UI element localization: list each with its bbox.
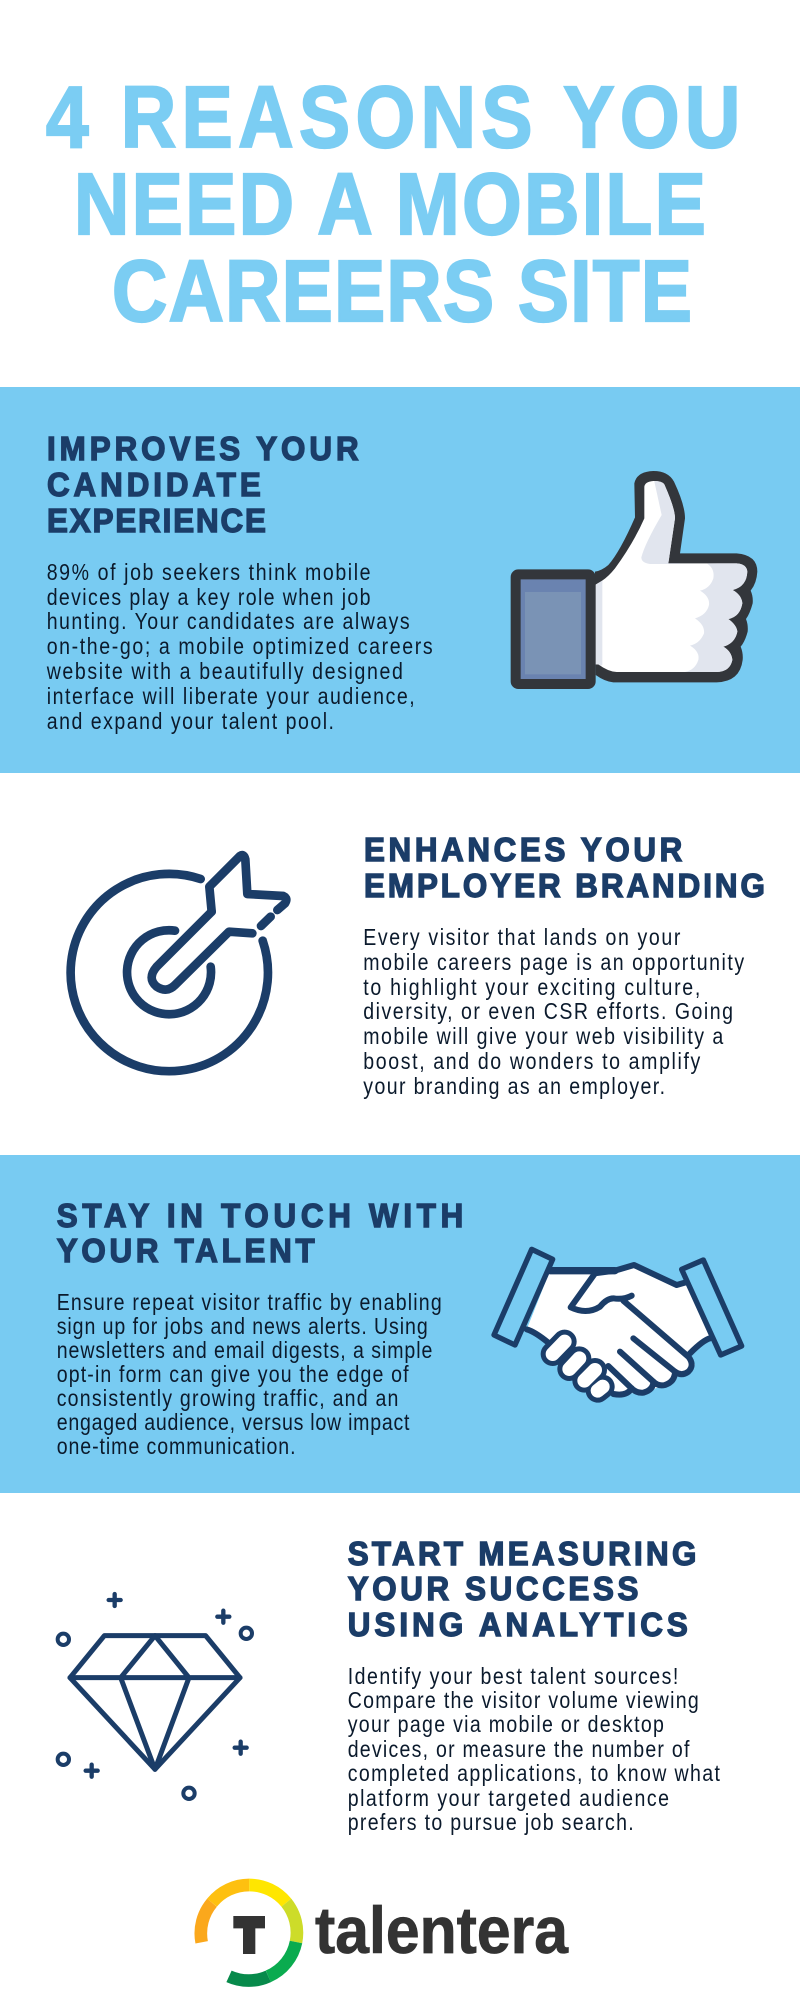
title	[46, 69, 740, 340]
panel: improves your candidate experience	[0, 387, 800, 773]
icon: handshake	[494, 1249, 742, 1397]
text block: stay in touch body: sign up for jobs and news alerts. Using	[57, 1314, 428, 1339]
heading: start measuring your success using analytics: USING ANALYTICS	[348, 1606, 688, 1643]
text block: employer branding body	[363, 925, 744, 1099]
logo: talentera	[201, 1885, 569, 1981]
text block: stay in touch body: opt-in form can give you the edge of	[57, 1362, 409, 1387]
heading: improves your candidate experience	[47, 430, 359, 539]
text block: employer branding body: mobile careers page is an opportunity	[363, 950, 744, 975]
text block: employer branding body: diversity, or even CSR efforts. Going	[363, 999, 733, 1024]
heading: start measuring your success using analytics: START MEASURING	[348, 1535, 696, 1572]
heading: start measuring your success using analytics	[348, 1535, 696, 1643]
icon: target with arrow	[71, 855, 286, 1071]
heading: stay in touch with your talent: STAY IN TOUCH WITH	[57, 1197, 463, 1234]
text block: stay in touch body: one-time communication.	[57, 1434, 296, 1459]
text block: stay in touch body: consistently growing traffic, and an	[57, 1386, 398, 1411]
heading: stay in touch with your talent: YOUR TALENT	[57, 1232, 315, 1269]
text block: employer branding body: mobile will give your web visibility a	[363, 1024, 723, 1049]
text block: employer branding body: boost, and do wonders to amplify	[363, 1049, 701, 1074]
icon: diamond with sparkles	[58, 1594, 252, 1799]
icon: talentera ring mark	[201, 1885, 297, 1981]
text block: stay in touch body: Ensure repeat visitor traffic by enabling	[57, 1290, 442, 1315]
wordmark: talentera	[315, 1893, 569, 1967]
heading: enhances your employer branding: ENHANCES YOUR	[364, 831, 682, 868]
text block: analytics body: devices, or measure the number of	[348, 1737, 689, 1762]
heading: enhances your employer branding	[364, 831, 765, 904]
title: 4 REASONS YOU	[46, 69, 740, 166]
heading: enhances your employer branding: EMPLOYER BRANDING	[364, 867, 765, 904]
text block: stay in touch body: newsletters and email digests, a simple	[57, 1338, 432, 1363]
text block: candidate experience body: and expand your talent pool.	[47, 709, 334, 734]
text block: analytics body: prefers to pursue job search.	[348, 1810, 634, 1835]
text block: employer branding body: to highlight your exciting culture,	[363, 975, 700, 1000]
text block: candidate experience body: interface will liberate your audience,	[47, 684, 415, 709]
text block: employer branding body: your branding as an employer.	[363, 1074, 665, 1099]
heading: start measuring your success using analytics: YOUR SUCCESS	[348, 1570, 638, 1607]
text block: candidate experience body: on-the-go; a mobile optimized careers	[47, 634, 433, 659]
text block: candidate experience body: devices play a key role when job	[47, 585, 371, 610]
panel: start measuring your success using analytics	[0, 1493, 800, 2000]
text block: analytics body: platform your targeted audience	[348, 1786, 669, 1811]
heading: improves your candidate experience: EXPERIENCE	[47, 502, 266, 539]
text block: candidate experience body: 89% of job seekers think mobile	[47, 560, 371, 585]
heading: improves your candidate experience: CANDIDATE	[47, 466, 261, 503]
text block: analytics body	[348, 1664, 720, 1835]
panel: enhances your employer branding	[0, 773, 800, 1155]
text block: employer branding body: Every visitor that lands on your	[363, 925, 680, 950]
icon: thumbs up	[516, 471, 757, 684]
text block: analytics body: Identify your best talent sources!	[348, 1664, 678, 1689]
text block: candidate experience body	[46, 560, 433, 734]
text block: stay in touch body: engaged audience, versus low impact	[57, 1410, 410, 1435]
text block: candidate experience body: website with a beautifully designed	[46, 659, 403, 684]
heading: improves your candidate experience: IMPROVES YOUR	[47, 430, 359, 467]
text block: analytics body: completed applications, to know what	[348, 1761, 720, 1786]
text block: analytics body: Compare the visitor volume viewing	[348, 1688, 699, 1713]
title: NEED A MOBILE	[74, 156, 706, 253]
panel: stay in touch with your talent	[0, 1155, 800, 1493]
heading: stay in touch with your talent	[57, 1197, 463, 1269]
text block: candidate experience body: hunting. Your candidates are always	[47, 609, 410, 634]
text block: analytics body: your page via mobile or desktop	[348, 1712, 664, 1737]
text block: stay in touch body	[57, 1290, 442, 1459]
title: CAREERS SITE	[112, 243, 692, 340]
